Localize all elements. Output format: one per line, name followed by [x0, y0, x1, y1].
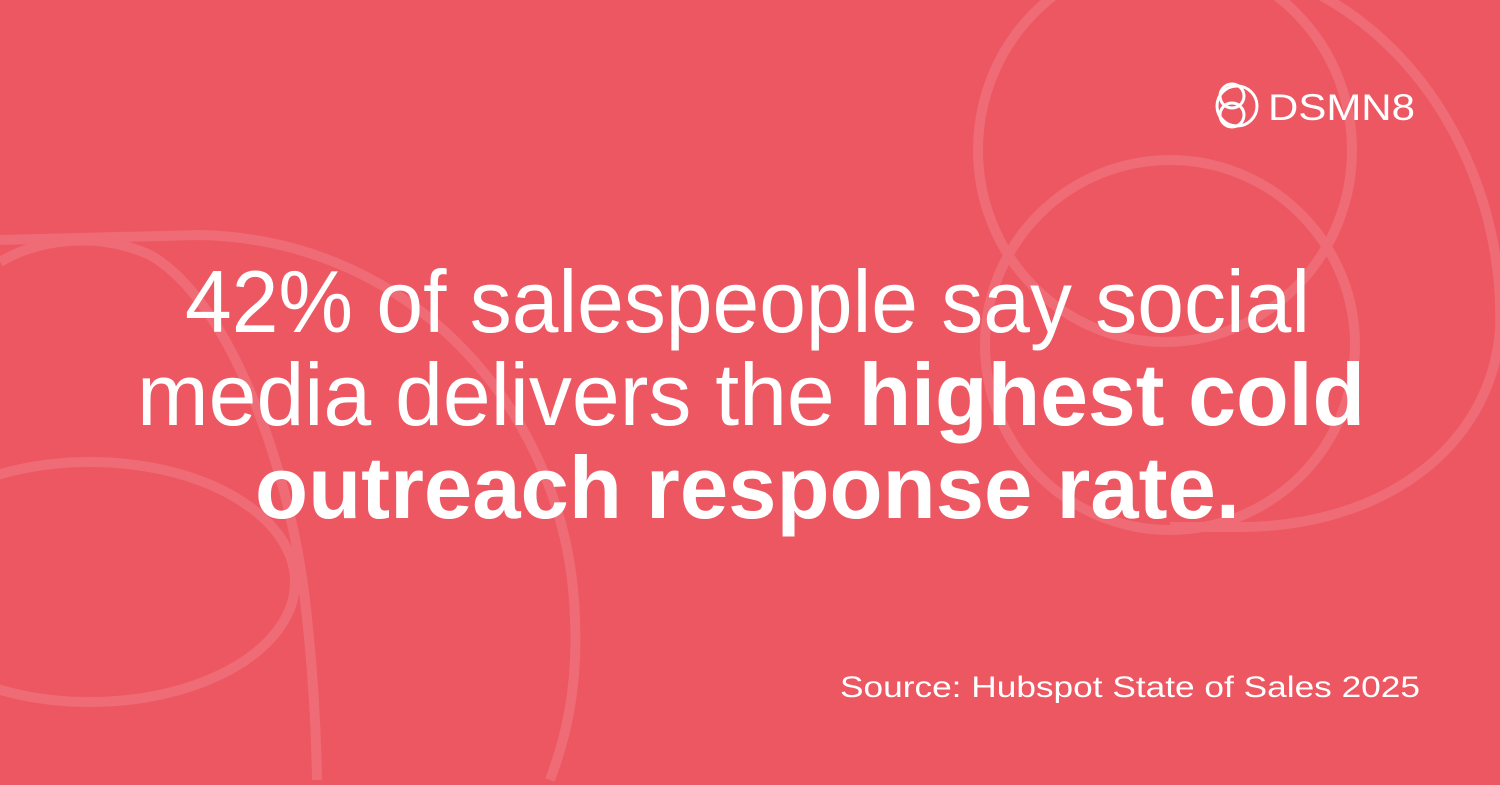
- headline statement: [137, 252, 1365, 537]
- logo: DSMN8: [1217, 84, 1415, 128]
- logo wordmark: DSMN8: [1268, 87, 1415, 128]
- headline statement: outreach response rate.: [255, 438, 1240, 537]
- source note: Source: Hubspot State of Sales 2025: [840, 671, 1420, 704]
- headline statement: 42% of salespeople say social: [185, 252, 1310, 351]
- headline statement: media delivers the highest cold: [137, 345, 1365, 444]
- icon: logo rings: [1217, 84, 1257, 127]
